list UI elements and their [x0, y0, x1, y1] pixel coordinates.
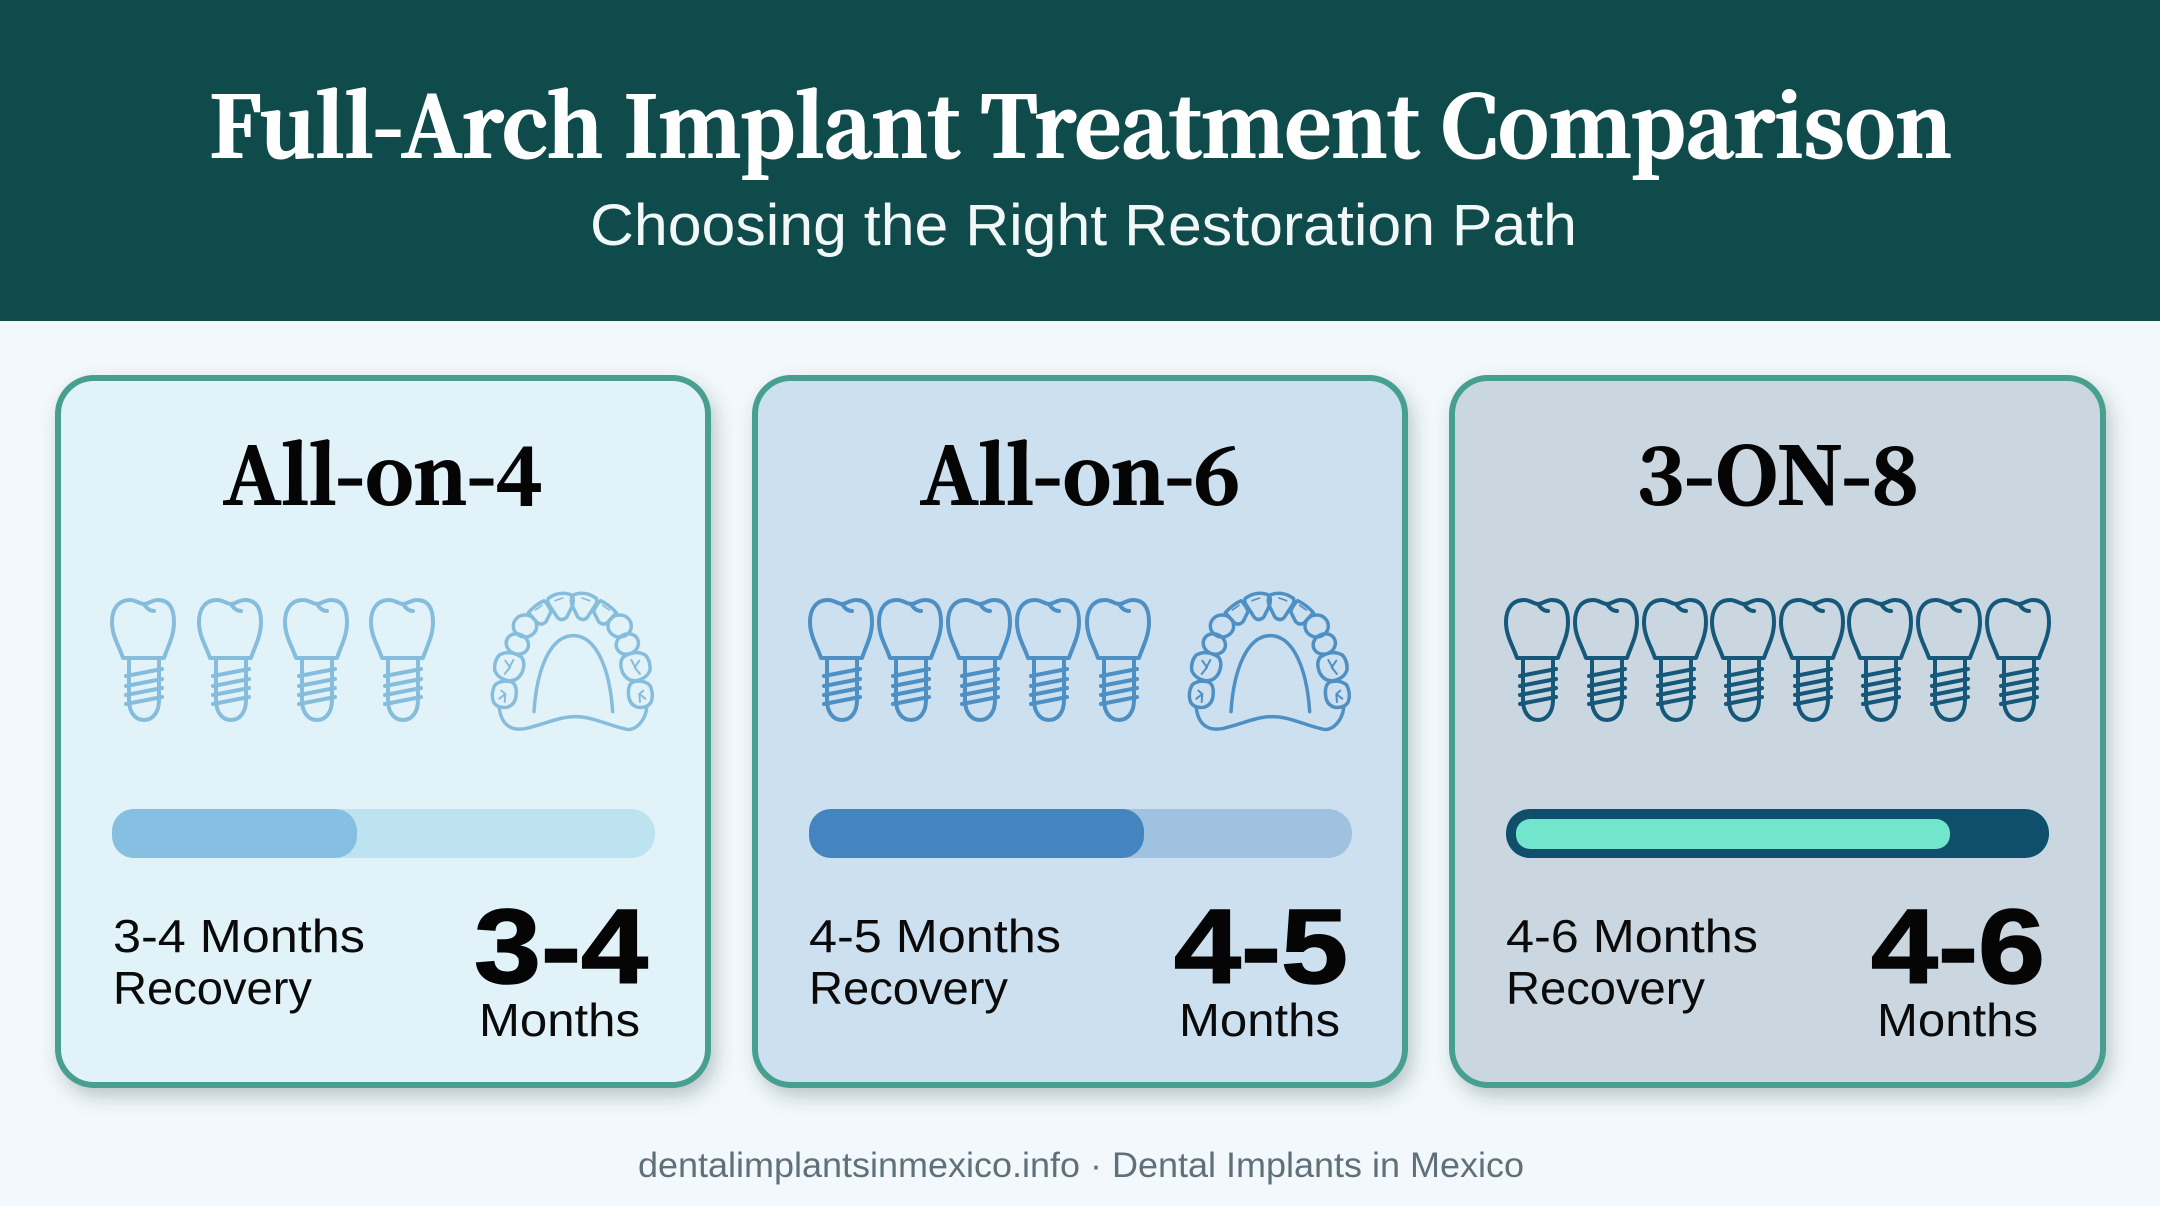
progress bar: 4-6 months [1506, 809, 2049, 858]
icon: 4 implants [112, 600, 433, 720]
footer credit: dentalimplantsinmexico.info · Dental Implants in Mexico [638, 1146, 1524, 1185]
months unit: Months [479, 994, 640, 1046]
recovery label: 4-6 Months [1506, 910, 1758, 962]
big duration: 3-4 [474, 888, 648, 1006]
big duration: 4-5 [1174, 888, 1348, 1006]
recovery label: Recovery [809, 962, 1008, 1014]
icon: 5 implants [810, 600, 1149, 720]
big duration: 4-6 [1871, 888, 2045, 1006]
heading: 3-ON-8: 3-ON-8 [1637, 415, 1919, 527]
title: Full-Arch Implant Treatment Comparison [209, 61, 1952, 182]
months unit: Months [1179, 994, 1340, 1046]
icon: denture arch [1189, 593, 1349, 729]
heading: All-on-4: All-on-4 [223, 415, 542, 527]
panel: All-on-4 [58, 378, 708, 1085]
progress bar: 3-4 months [112, 809, 655, 858]
heading: All-on-6: All-on-6 [920, 415, 1240, 527]
recovery label: Recovery [113, 962, 312, 1014]
icon: 8 implants [1506, 600, 2049, 720]
header band [0, 0, 2160, 321]
progress bar: 4-5 months [809, 809, 1352, 858]
panel: 3-ON-8 [1452, 378, 2103, 1085]
recovery label: Recovery [1506, 962, 1705, 1014]
months unit: Months [1877, 994, 2038, 1046]
panel: All-on-6 [755, 378, 1405, 1085]
icon: denture arch [492, 593, 652, 729]
recovery label: 4-5 Months [809, 910, 1061, 962]
subtitle: Choosing the Right Restoration Path [590, 193, 1577, 258]
recovery label: 3-4 Months [113, 910, 365, 962]
